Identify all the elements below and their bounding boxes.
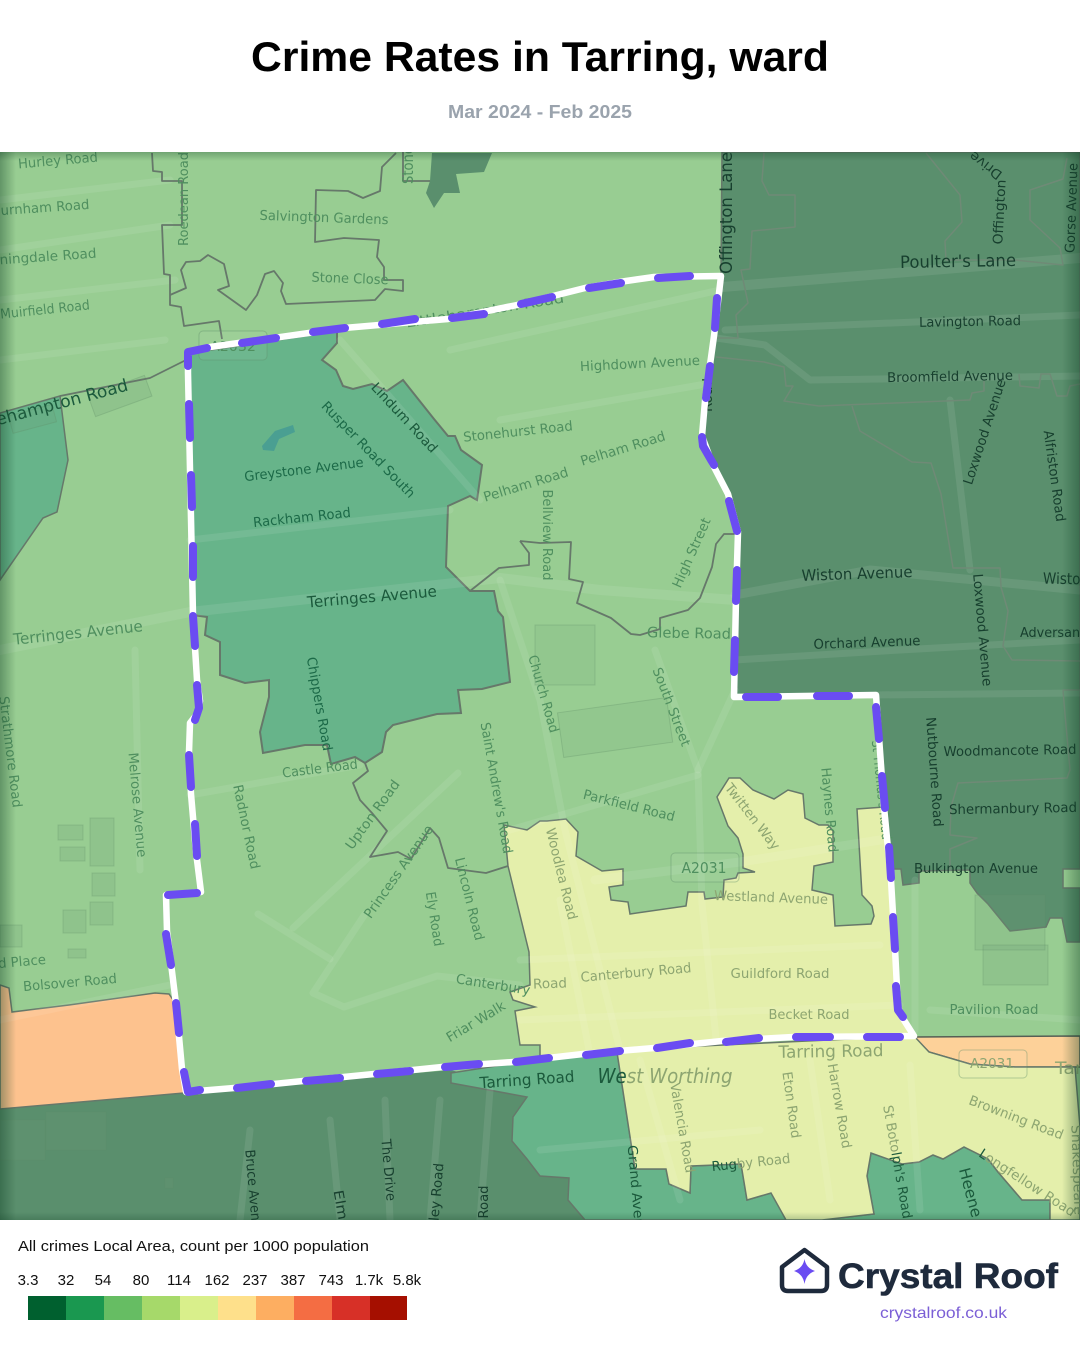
- street labels: Browning Road: [966, 1093, 1066, 1143]
- street labels: Harrow Road: [824, 1062, 854, 1150]
- choropleth area: medium green St Botolph's: [822, 1147, 1050, 1220]
- street labels: urnham Road: [0, 197, 90, 219]
- street labels: Saint Andrew's Road: [477, 721, 515, 855]
- street labels: Church Road: [524, 653, 562, 735]
- street labels: Loxwood Avenue: [969, 573, 995, 687]
- street labels: Princess Avenue: [361, 822, 437, 922]
- street labels: Road: [700, 378, 716, 412]
- street labels: Broomfield Avenue: [887, 368, 1013, 386]
- ward boundary: purple dashes: [166, 276, 903, 1092]
- legend scale labels: 32: [58, 1272, 74, 1289]
- street labels: Parkfield Road: [581, 787, 677, 825]
- legend title: All crimes Local Area, count per 1000 population: [18, 1238, 369, 1255]
- street labels: Rusper Road South: [318, 398, 418, 502]
- street labels: Salvington Gardens: [259, 208, 389, 228]
- street labels: Highdown Avenue: [580, 353, 700, 375]
- street labels: Terringes Avenue: [11, 617, 144, 649]
- street labels: Tarring Road: [777, 1041, 884, 1063]
- street labels: ley Road: [427, 1162, 447, 1222]
- legend scale labels: 237: [242, 1272, 268, 1289]
- street labels: Becket Road: [768, 1007, 850, 1023]
- choropleth area: south-west high band: [0, 1070, 584, 1220]
- legend colour ramp: [28, 1296, 407, 1320]
- street labels: Eton Road: [778, 1071, 804, 1139]
- street labels: Poulter's Lane: [900, 251, 1016, 273]
- street labels: A2032: [210, 339, 256, 355]
- street labels: Loxwood Avenue: [960, 377, 1010, 487]
- street labels: Rackham Road: [252, 505, 352, 531]
- street labels: Woodlea Road: [542, 826, 580, 922]
- street labels: Pavilion Road: [950, 1002, 1038, 1018]
- street labels: Longfellow Road: [976, 1146, 1078, 1220]
- choropleth area: orange south-west: [0, 985, 184, 1109]
- legend scale labels: 54: [95, 1272, 111, 1289]
- street labels: A2031: [682, 859, 726, 877]
- street labels: Upton Road: [342, 777, 404, 853]
- legend scale labels: [18, 1272, 422, 1289]
- map edge vignette: [0, 152, 1080, 1220]
- street labels: Road: [533, 975, 567, 993]
- building and park plots: [0, 375, 1048, 1188]
- title: Crime Rates in Tarring, ward: [251, 33, 829, 80]
- street labels: Twitten Way: [720, 780, 783, 853]
- street labels: Woodmancote Road: [943, 742, 1077, 760]
- street labels: The Drive: [377, 1137, 399, 1202]
- street labels: Haynes Road: [817, 767, 841, 853]
- street labels: Wiston Avenue: [801, 563, 913, 585]
- street labels: A2031: [970, 1056, 1014, 1072]
- website link text: crystalroof.co.uk: [880, 1305, 1008, 1322]
- street labels: Ely Road: [422, 891, 446, 947]
- ward boundary: white line: [166, 276, 914, 1092]
- internal neighbourhood boundaries: [60, 152, 738, 873]
- street labels: Castle Road: [281, 756, 359, 782]
- street labels: Drive: [966, 147, 1006, 183]
- street labels: Bellview Road: [539, 490, 555, 580]
- street labels: Pelham Road: [482, 464, 570, 506]
- street labels: Offington: [990, 179, 1010, 245]
- street labels: Lincoln Road: [451, 856, 487, 942]
- street labels: ningdale Road: [0, 246, 97, 268]
- street labels: Radnor Road: [229, 783, 263, 871]
- street labels: High Street: [669, 515, 715, 591]
- choropleth area: yellow ward south-east: [504, 778, 914, 1059]
- legend scale labels: 80: [133, 1272, 149, 1289]
- street labels: Glebe Road: [647, 625, 731, 643]
- street labels: Canterbury Road: [580, 960, 692, 986]
- street labels: Shermanbury Road: [949, 800, 1077, 818]
- street labels: Road: [476, 1186, 492, 1218]
- street labels: Stone: [399, 146, 417, 184]
- street labels: Orchard Avenue: [813, 633, 921, 653]
- street labels: Greystone Avenue: [243, 455, 365, 485]
- street labels: Lindum Road: [367, 380, 441, 456]
- faint boundaries in north-east band: [716, 153, 1080, 871]
- street labels: Stone Close: [311, 270, 389, 288]
- street labels: St Thomas's Road: [868, 739, 894, 841]
- street labels: South Street: [649, 665, 693, 749]
- road network: [0, 180, 1080, 1220]
- street labels: West Worthing: [598, 1064, 732, 1088]
- street labels: Friar Walk: [444, 998, 509, 1046]
- legend scale labels: 162: [204, 1272, 230, 1289]
- street labels: Rugby Road: [711, 1151, 791, 1175]
- choropleth area: medium green ward north-west: [189, 331, 510, 764]
- street labels: Pelham Road: [579, 428, 667, 470]
- choropleth area: orange east: [914, 1036, 1080, 1067]
- legend scale labels: 3.3: [18, 1272, 38, 1289]
- street labels: Valencia Road: [666, 1082, 698, 1174]
- street labels: St Botolph's Road: [879, 1104, 915, 1220]
- choropleth area: yellow south: [616, 1038, 1080, 1220]
- street labels: Offington Lane: [717, 152, 737, 274]
- street labels: Littlehampton Road: [405, 291, 565, 331]
- street labels: Roedean Road: [176, 152, 192, 246]
- street labels: Bruce Avenue: [241, 1149, 265, 1237]
- choropleth area: medium green south blob: [451, 1052, 786, 1220]
- street labels: Bolsover Road: [22, 971, 118, 995]
- choropleth area: north-east high band: [702, 152, 1080, 942]
- street labels: Terringes Avenue: [305, 582, 438, 612]
- street labels: Melrose Avenue: [124, 752, 150, 858]
- street labels: Tarring Road: [478, 1068, 575, 1092]
- street labels: Alfriston Road: [1040, 429, 1068, 523]
- choropleth area: small dark patch north: [426, 153, 492, 208]
- street labels: Nutbourne Road: [922, 717, 946, 827]
- legend scale labels: 387: [280, 1272, 306, 1289]
- street labels: Elm: [330, 1189, 350, 1221]
- logo icon: house with sparkle: [782, 1250, 827, 1291]
- street labels: Canterbury: [455, 971, 531, 999]
- logo wordmark: Crystal Roof: [838, 1257, 1058, 1296]
- road shields: [199, 331, 1027, 1078]
- street labels: Chippers Road: [303, 656, 335, 752]
- street labels: Bulkington Avenue: [914, 861, 1038, 877]
- subtitle: date range: Mar 2024 - Feb 2025: [448, 102, 632, 122]
- street labels: Heene Road: [955, 1166, 997, 1262]
- street labels: Lavington Road: [919, 313, 1021, 331]
- street labels: Hurley Road: [17, 150, 99, 172]
- street labels: Grand Avenue: [624, 1144, 648, 1246]
- legend scale labels: 114: [167, 1272, 191, 1289]
- legend scale labels: 1.7k: [355, 1272, 384, 1289]
- pond: [262, 425, 295, 451]
- legend scale labels: 743: [318, 1272, 344, 1289]
- street labels: Muirfield Road: [0, 297, 91, 323]
- street labels: Stonehurst Road: [462, 418, 574, 446]
- street labels: Westland Avenue: [714, 888, 828, 908]
- legend scale labels: 5.8k: [393, 1272, 422, 1289]
- choropleth area: medium green west edge: [0, 396, 68, 580]
- street labels: Guildford Road: [730, 966, 830, 982]
